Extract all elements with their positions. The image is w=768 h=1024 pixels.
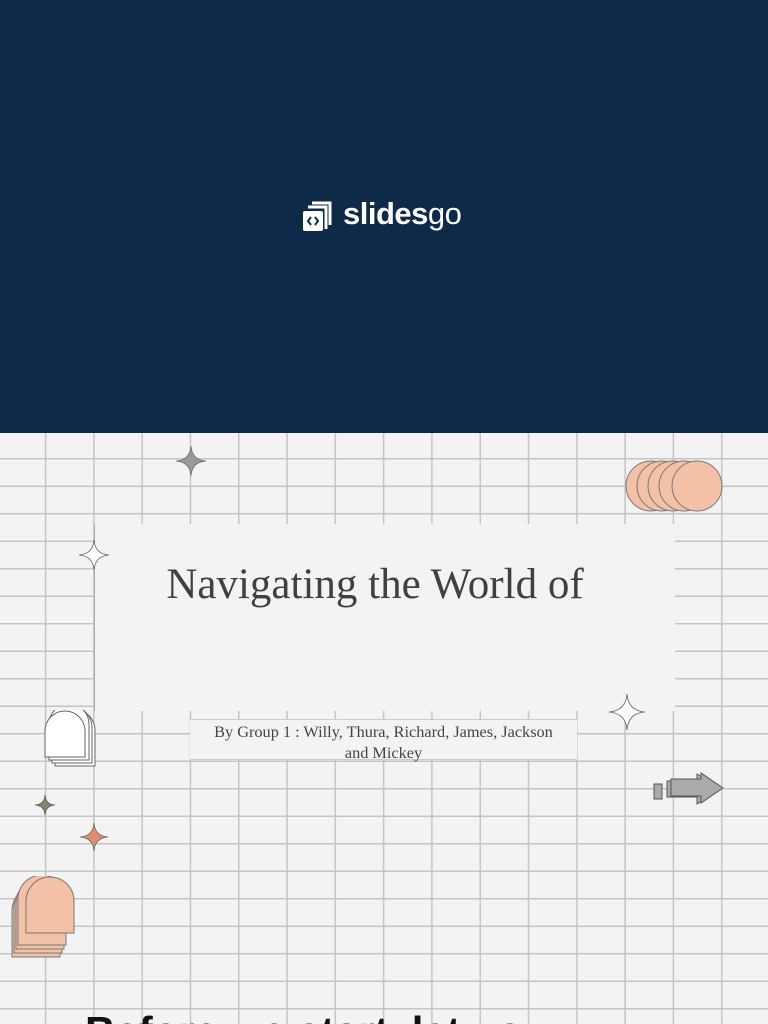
icon: white star right <box>609 694 645 730</box>
icon: white star left <box>79 540 109 570</box>
icon: peach arch stack <box>12 876 74 958</box>
title panel <box>94 524 675 711</box>
icon: grey arrow <box>654 772 724 805</box>
icon: green star <box>35 795 55 815</box>
icon: white arch stack <box>44 710 96 766</box>
icon: peach circles stack <box>626 460 722 512</box>
grid background <box>0 433 768 1024</box>
icon: orange star <box>80 823 108 851</box>
subtitle box <box>190 719 577 760</box>
logo text: slidesgo <box>343 196 461 231</box>
logo: slidesgo <box>303 196 461 231</box>
header band <box>0 0 768 433</box>
icon: slides logo <box>303 202 332 231</box>
subtitle box: and Mickey <box>345 743 422 762</box>
icon: grey star top <box>176 446 206 476</box>
subtitle box: By Group 1 : Willy, Thura, Richard, James, Jackson <box>214 722 553 741</box>
title: Navigating the World of <box>166 561 584 608</box>
